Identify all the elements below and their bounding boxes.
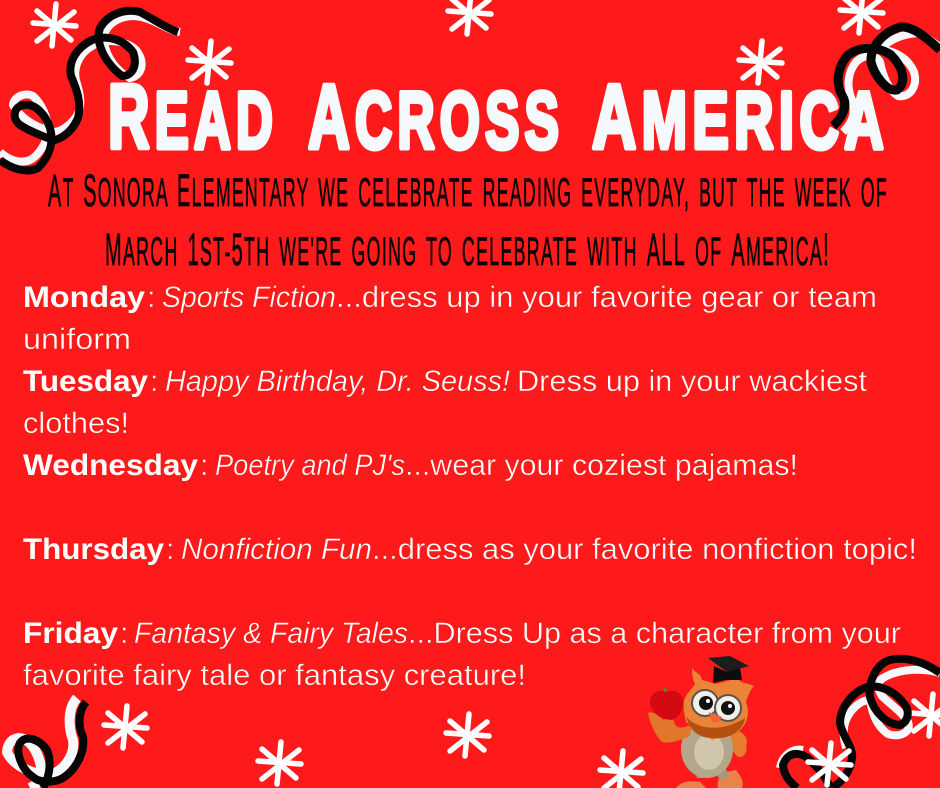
owl belly [681, 720, 733, 778]
schedule: Tuesday: Tuesday [23, 365, 148, 398]
schedule: Tuesday: clothes! [23, 407, 129, 440]
ribbon: top right [833, 27, 940, 132]
star over bottom-right ribbon [808, 743, 851, 785]
schedule: Wednesday: : [200, 449, 208, 482]
schedule: Friday: : [120, 617, 128, 650]
schedule: Wednesday: Wednesday [23, 449, 198, 482]
schedule: Friday: Friday [23, 617, 118, 650]
schedule: Tuesday [23, 365, 868, 440]
schedule: Monday: Monday [23, 281, 145, 314]
subtitle [48, 165, 888, 275]
graduation cap [708, 656, 749, 672]
schedule: Thursday: ...dress as your favorite nonfiction topic! [372, 533, 917, 566]
schedule: Monday: Sports Fiction [162, 281, 336, 314]
apple [650, 691, 683, 720]
schedule: Tuesday: Happy Birthday, Dr. Seuss! [165, 365, 511, 398]
title: READ [108, 67, 278, 168]
owl glasses and eyes [692, 690, 718, 716]
ribbon: bottom left [7, 698, 86, 788]
schedule: Monday: : [147, 281, 155, 314]
schedule: Tuesday: Dress up in your wackiest [517, 365, 868, 398]
schedule: Friday: ...Dress Up as a character from your [408, 617, 901, 650]
schedule: Thursday [23, 533, 917, 566]
schedule: Monday: uniform [23, 323, 131, 356]
owl neck ruff [686, 716, 745, 738]
schedule: Monday [23, 281, 877, 356]
title [108, 67, 889, 168]
schedule: Thursday: Nonfiction Fun [181, 533, 372, 566]
schedule: Monday: ...dress up in your favorite gear or team [336, 281, 877, 314]
schedule: Wednesday: ...wear your coziest pajamas! [405, 449, 798, 482]
title: ACROSS [308, 67, 564, 168]
owl arm and hand [648, 712, 692, 743]
schedule: Thursday: Thursday [23, 533, 164, 566]
owl wing right [730, 728, 747, 757]
owl beak [709, 712, 722, 723]
ribbon: bottom right [780, 659, 940, 788]
schedule: Thursday: : [166, 533, 174, 566]
schedule: Wednesday: Poetry and PJ's [215, 449, 405, 482]
schedule: Tuesday: : [150, 365, 158, 398]
schedule: Friday [23, 617, 901, 692]
schedule: Wednesday [23, 449, 798, 482]
icon: owl with apple and graduation cap [648, 656, 754, 788]
owl head feathers [684, 668, 754, 740]
schedule: Friday: favorite fairy tale or fantasy creature! [23, 659, 526, 692]
schedule: Friday: Fantasy & Fairy Tales [134, 617, 408, 650]
owl feet [676, 770, 743, 788]
ribbon: top left [0, 11, 180, 170]
owl legs [694, 766, 730, 780]
